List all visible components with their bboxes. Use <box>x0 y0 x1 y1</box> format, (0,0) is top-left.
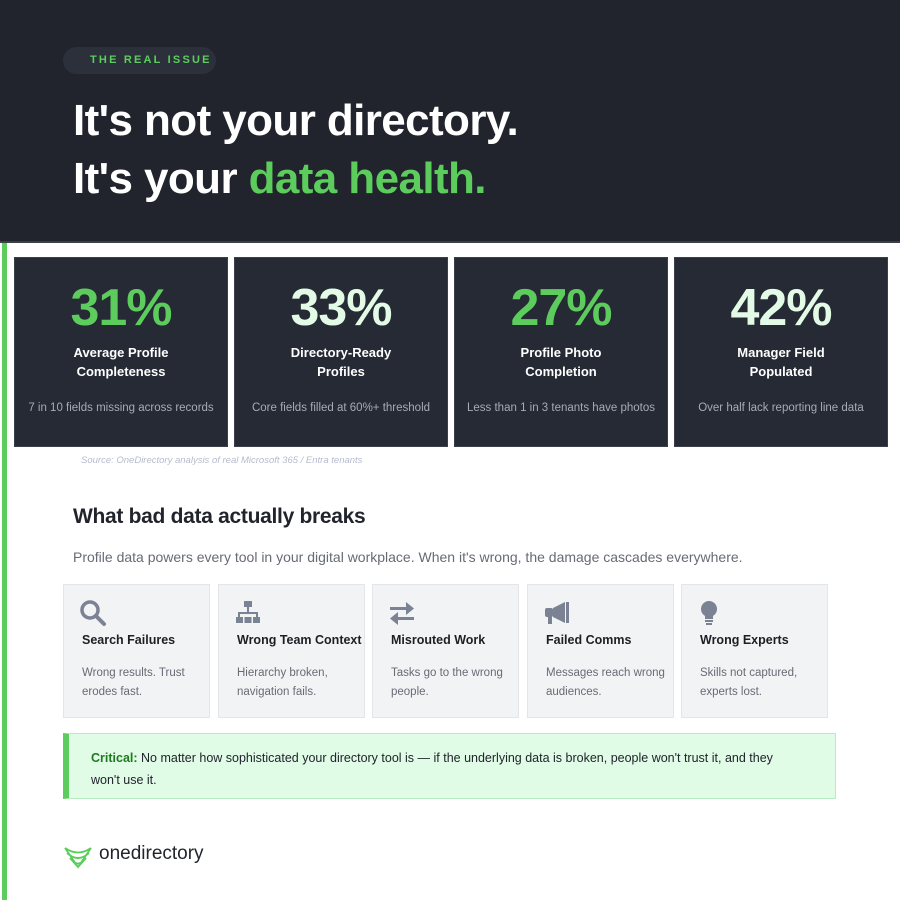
accent bar <box>2 243 7 900</box>
title: It's not your directory. <box>73 96 518 145</box>
card: wrong experts: Skills not captured, experts lost. <box>700 667 797 698</box>
card: misrouted work: Tasks go to the wrong people. <box>391 667 503 698</box>
header <box>0 0 900 243</box>
stat: 27%: Profile Photo <box>521 345 601 360</box>
card: search failures: Search Failures <box>82 633 175 647</box>
stat: 33%: 33% <box>290 279 392 337</box>
stat: 31%: 31% <box>70 279 172 337</box>
stat: 42%: Populated <box>750 364 812 379</box>
card: search failures: Wrong results. Trust erodes fast. <box>82 667 185 698</box>
stat: 42%: Over half lack reporting line data <box>698 402 864 414</box>
card: failed comms <box>527 584 674 718</box>
section intro: Profile data powers every tool in your digital workplace. When it's wrong, the damage cascades everywhere. <box>73 549 743 565</box>
logo <box>64 843 204 868</box>
card: wrong team context: Hierarchy broken, navigation fails. <box>237 667 328 698</box>
card: wrong team context: Wrong Team Context <box>237 633 362 647</box>
pill: the real issue: THE REAL ISSUE <box>90 54 212 66</box>
stat: 42%: 42% <box>730 279 832 337</box>
stat: 33%: Directory-Ready <box>291 345 391 360</box>
stat: 31%: 7 in 10 fields missing across records <box>28 402 214 414</box>
stat: 42%: Manager Field <box>737 345 825 360</box>
stat: 33% <box>234 257 448 447</box>
card: wrong experts: Wrong Experts <box>700 633 789 647</box>
title: It's your data health. <box>73 154 486 203</box>
card: wrong team context <box>218 584 365 718</box>
card: wrong experts <box>681 584 828 718</box>
stat: 33%: Profiles <box>317 364 365 379</box>
callout: critical: Critical: No matter how sophisticated your directory tool is — if the underlying data is broken, people won't trust it, and they won't use it. <box>91 751 773 787</box>
card: misrouted work <box>372 584 519 718</box>
title <box>73 96 518 203</box>
card: search failures <box>63 584 210 718</box>
card: failed comms: Messages reach wrong audiences. <box>546 667 665 698</box>
stat: 31%: Average Profile <box>74 345 168 360</box>
section heading: What bad data actually breaks <box>73 505 365 528</box>
stat: 27%: Less than 1 in 3 tenants have photos <box>467 402 655 414</box>
stat: 31% <box>14 257 228 447</box>
callout: critical <box>63 733 836 799</box>
stat: 42% <box>674 257 888 447</box>
stat: 27%: 27% <box>510 279 612 337</box>
logo: onedirectory <box>99 843 204 864</box>
stat: 31%: Completeness <box>77 364 165 379</box>
stat: 27% <box>454 257 668 447</box>
card: failed comms: Failed Comms <box>546 633 631 647</box>
pill: the real issue <box>63 47 216 74</box>
stat: 27%: Completion <box>525 364 597 379</box>
card: misrouted work: Misrouted Work <box>391 633 485 647</box>
source note: Source: OneDirectory analysis of real Microsoft 365 / Entra tenants <box>81 455 362 466</box>
stat: 33%: Core fields filled at 60%+ threshold <box>252 402 430 414</box>
